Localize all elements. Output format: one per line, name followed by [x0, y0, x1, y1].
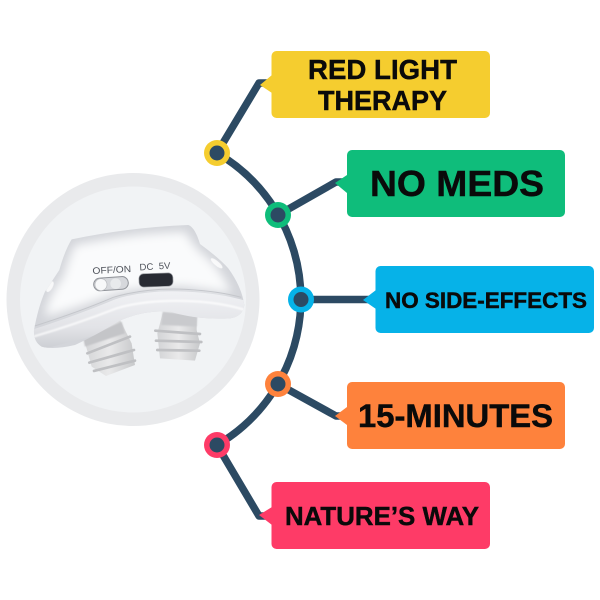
- callout: red light therapy: [260, 51, 490, 118]
- connector lines: [217, 83, 374, 516]
- callout: no side-effects: [363, 266, 594, 333]
- node: orange: [265, 371, 291, 397]
- callout: red light therapy: THERAPY: [318, 85, 447, 116]
- icon: usb-c port: [139, 273, 173, 287]
- timeline arc: [217, 153, 301, 445]
- bumps: [45, 257, 224, 293]
- callout: 15-minutes: 15-MINUTES: [358, 398, 553, 434]
- node: green: [265, 202, 291, 228]
- right nozzle: [155, 312, 201, 361]
- node: yellow: [204, 140, 230, 166]
- icon: switch: [93, 276, 129, 291]
- icon: nasal device: [33, 225, 247, 376]
- node: blue: [288, 286, 314, 312]
- node: pink: [204, 432, 230, 458]
- callout: nature's way: [259, 482, 490, 549]
- callout: no side-effects: NO SIDE-EFFECTS: [385, 288, 587, 313]
- left nozzle: [83, 320, 135, 376]
- device face highlight: [45, 232, 232, 317]
- device rim: [33, 291, 247, 352]
- callout: no meds: NO MEDS: [370, 163, 544, 204]
- label: off/on: OFF/ON: [92, 264, 131, 276]
- panel: product image circle: [6, 173, 260, 426]
- callout: no meds: [335, 150, 565, 217]
- callout: nature's way: NATURE’S WAY: [285, 501, 479, 531]
- device body: [34, 225, 244, 348]
- callout: red light therapy: RED LIGHT: [308, 54, 457, 85]
- callout: 15-minutes: [335, 382, 565, 449]
- label: DC 5V: DC 5V: [139, 261, 172, 272]
